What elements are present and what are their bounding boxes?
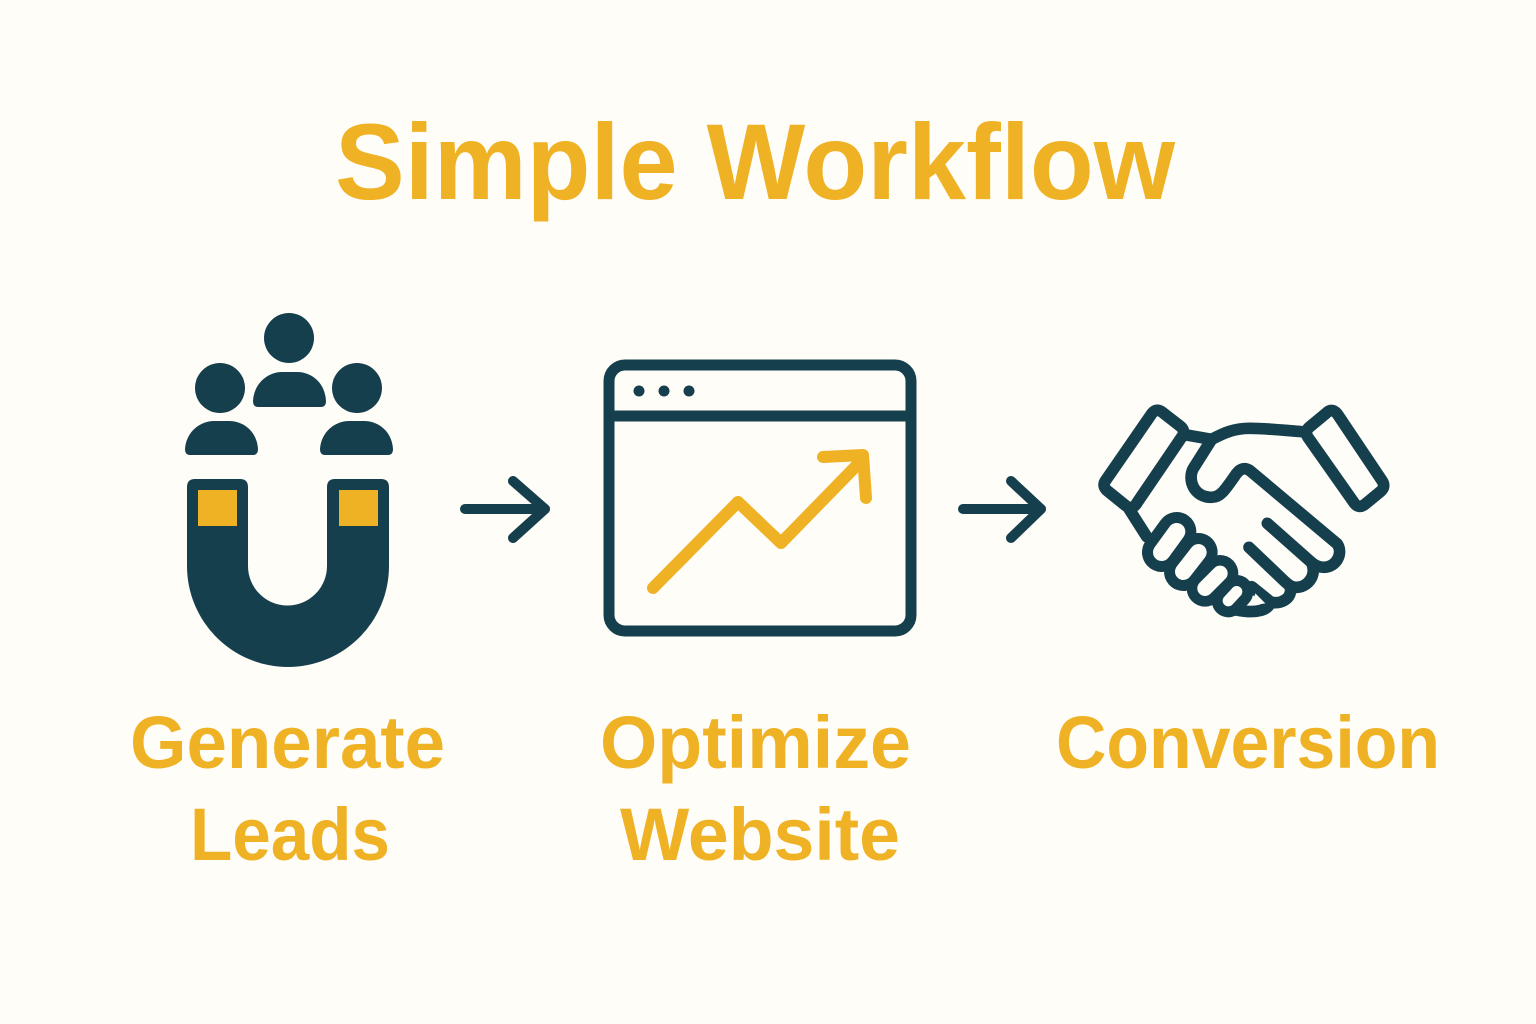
growth arrow <box>653 455 866 588</box>
icon: magnet attracting people <box>185 313 393 667</box>
label: Generate Leads: Leads <box>190 793 390 876</box>
arrow: leads to website <box>465 481 545 538</box>
icon: right person <box>320 363 393 455</box>
browser title bar divider <box>609 410 911 422</box>
second finger of right hand <box>1249 547 1313 587</box>
top of hands <box>1187 428 1302 439</box>
browser frame <box>609 365 911 631</box>
label: Optimize Website <box>600 701 911 876</box>
label: Generate Leads: Generate <box>130 701 445 784</box>
label: Optimize Website: Website <box>620 793 900 876</box>
label: Conversion: Conversion <box>1056 701 1440 784</box>
thumb and right hand <box>1191 439 1340 567</box>
left wrist <box>1129 509 1147 537</box>
magnet right pole <box>339 490 378 526</box>
icon: left person <box>185 363 258 455</box>
label: Generate Leads <box>130 701 445 876</box>
label: Optimize Website: Optimize <box>600 701 911 784</box>
magnet left pole <box>198 490 237 526</box>
icon: top person <box>253 313 326 407</box>
browser dots <box>634 386 694 396</box>
lower palm <box>1237 602 1271 612</box>
icon: magnet body <box>187 479 389 667</box>
third finger of right hand <box>1252 587 1291 603</box>
left hand fingers <box>1162 532 1237 601</box>
small palm gap <box>1252 593 1265 605</box>
title: Simple Workflow <box>335 101 1176 222</box>
left cuff <box>1104 410 1184 508</box>
icon: handshake <box>1104 410 1384 612</box>
arrow: website to conversion <box>963 481 1041 538</box>
right cuff <box>1306 410 1384 506</box>
icon: browser window with growth chart <box>609 365 911 631</box>
